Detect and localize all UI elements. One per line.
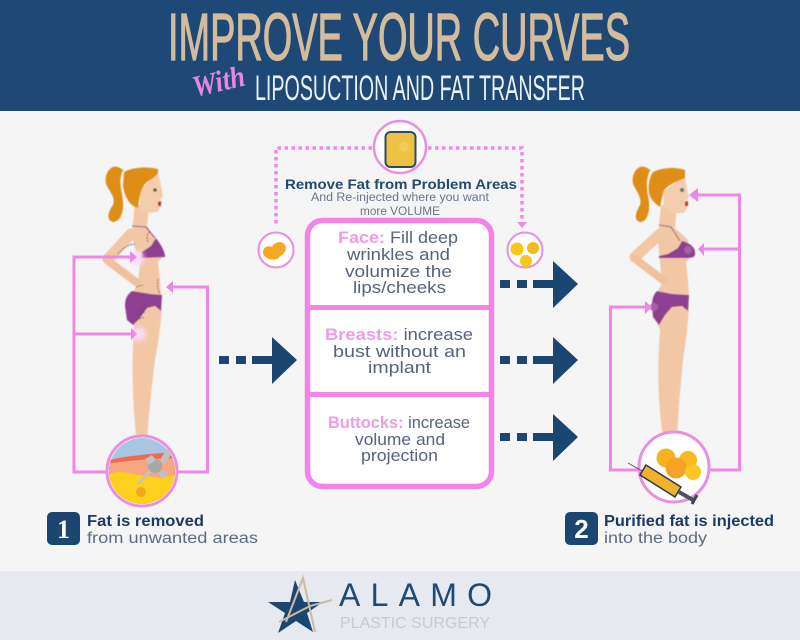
right torso bbox=[655, 226, 690, 296]
logo tagline: PLASTIC SURGERY bbox=[340, 615, 490, 632]
step 1 caption: Fat is removed bbox=[87, 513, 204, 530]
buttocks text: volume and bbox=[355, 430, 445, 449]
ponytail bbox=[106, 167, 124, 222]
center heading: more VOLUME bbox=[360, 206, 440, 218]
icon: fat jar bbox=[374, 121, 426, 173]
icon: syringe bbox=[628, 463, 697, 504]
center heading: Remove Fat from Problem Areas bbox=[285, 176, 517, 192]
face bbox=[663, 175, 689, 213]
right connector lines bbox=[610, 195, 740, 470]
arrow: breasts bbox=[500, 337, 578, 384]
lips and eye bbox=[158, 201, 161, 206]
face bbox=[140, 172, 163, 213]
center heading bbox=[285, 176, 517, 218]
cannula tool bbox=[138, 449, 172, 484]
badge 1 bbox=[47, 512, 80, 545]
glow marks on target areas bbox=[130, 251, 146, 341]
logo star bbox=[268, 578, 332, 633]
breasts text: implant bbox=[368, 358, 431, 377]
face text bbox=[338, 228, 458, 297]
circle: injected fat with syringe bbox=[628, 432, 709, 504]
script word: With: With bbox=[189, 60, 248, 104]
face text: lips/cheeks bbox=[353, 278, 446, 297]
left connector lines bbox=[74, 257, 208, 472]
breasts text bbox=[325, 325, 473, 377]
lips and eye bbox=[685, 201, 688, 206]
arrows: center to right bbox=[500, 261, 578, 461]
hair bbox=[649, 168, 685, 207]
step 2 caption: 2 bbox=[574, 514, 589, 544]
step 2 caption: Purified fat is injected bbox=[604, 513, 774, 530]
buttocks text: projection bbox=[361, 446, 438, 465]
right arm bbox=[635, 234, 660, 257]
step 1 caption bbox=[47, 512, 258, 547]
icon: purified fat bbox=[508, 232, 542, 268]
breasts text: Breasts: increase bbox=[325, 325, 473, 344]
face text: wrinkles and bbox=[346, 245, 450, 264]
step 1 caption: from unwanted areas bbox=[87, 530, 258, 547]
step 2 caption: into the body bbox=[604, 530, 707, 547]
right leg bbox=[652, 298, 689, 442]
left leg bbox=[128, 298, 162, 442]
face text: Face: Fill deep bbox=[338, 228, 458, 247]
buttocks text bbox=[328, 413, 470, 465]
icon: removed fat bbox=[258, 232, 294, 268]
left arrowheads bbox=[130, 251, 173, 340]
logo wordmark: ALAMO bbox=[339, 577, 492, 613]
dotted process line bbox=[276, 148, 522, 226]
panel: treatment areas bbox=[306, 220, 493, 486]
bra bbox=[659, 241, 695, 258]
bra bbox=[141, 238, 165, 258]
circle: liposuction cross-section bbox=[105, 435, 179, 510]
breasts text: bust without an bbox=[333, 342, 466, 361]
left figure: before bbox=[106, 167, 165, 442]
panties bbox=[652, 291, 689, 325]
panties bbox=[125, 291, 162, 325]
left arm bbox=[108, 234, 131, 259]
arrow: left to center bbox=[219, 337, 297, 384]
buttocks text: Buttocks: increase bbox=[328, 413, 470, 432]
dotted line arrowhead bbox=[517, 222, 527, 228]
face text: volumize the bbox=[345, 262, 452, 281]
left torso bbox=[130, 226, 163, 296]
ponytail bbox=[633, 167, 651, 222]
hair bbox=[123, 167, 158, 208]
neck bbox=[132, 205, 149, 230]
right arrowheads bbox=[645, 188, 704, 314]
badge 2 bbox=[565, 512, 598, 545]
header banner bbox=[0, 0, 800, 111]
right figure: after bbox=[633, 167, 695, 442]
arrow: face bbox=[500, 261, 578, 308]
step 2 caption bbox=[565, 512, 774, 547]
incision marks bbox=[118, 232, 160, 320]
arrow: buttocks bbox=[500, 414, 578, 461]
step 1 caption: 1 bbox=[57, 515, 70, 544]
neck bbox=[659, 205, 677, 228]
center heading: And Re-injected where you want bbox=[311, 192, 490, 204]
footer band bbox=[0, 571, 800, 640]
